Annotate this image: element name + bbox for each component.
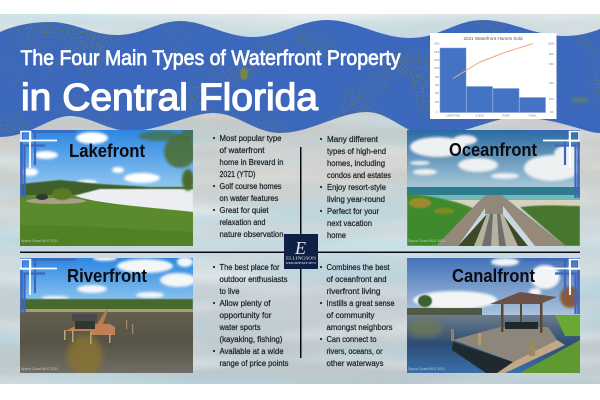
axis labels: 0%: [550, 111, 554, 114]
axis labels: 1200: [434, 59, 440, 62]
panel: lakefront photo: [20, 129, 200, 246]
title: [20, 47, 401, 119]
cumulative line: [453, 44, 533, 78]
text block: oceanfront bullets: [320, 135, 391, 240]
text block: riverfront bullets: (kayaking, fishing): [220, 335, 283, 344]
text block: canalfront bullets: Instills a great sense: [326, 299, 395, 308]
axis labels: 800: [435, 76, 440, 79]
axis labels: 1000: [434, 67, 440, 70]
logo wordmark: ELLINGSON: [286, 256, 316, 260]
text block: lakefront bullets: Golf course homes: [220, 182, 282, 191]
corner decoration: bottom left, riverfront: [20, 258, 76, 314]
bar chart: 2021 waterfront homes sold: [430, 33, 556, 119]
text block: oceanfront bullets: Perfect for your: [327, 207, 379, 216]
title: in Central Florida: [21, 77, 319, 119]
text block: oceanfront bullets: Many different: [327, 135, 379, 144]
axis labels: RIVER: [502, 114, 510, 118]
text block: riverfront bullets: Allow plenty of: [220, 299, 271, 308]
text block: lakefront bullets: of waterfront: [220, 146, 265, 155]
label: riverfront: Riverfront: [67, 266, 147, 286]
watermarks: Space Coast MLS 2021: [408, 239, 445, 243]
text block: lakefront bullets: 2021 (YTD): [220, 170, 256, 179]
text block: riverfront bullets: [213, 263, 288, 368]
corner decoration: top right, oceanfront: [524, 130, 580, 198]
axis labels: 0: [436, 111, 438, 114]
axis labels: 20%: [549, 98, 555, 101]
axis labels: 100%: [548, 42, 555, 46]
text block: canalfront bullets: riverfront living: [326, 287, 380, 296]
bars: [440, 48, 546, 112]
text block: oceanfront bullets: condos and estates: [327, 171, 391, 180]
text block: riverfront bullets: to live: [220, 287, 240, 296]
text block: riverfront bullets: range of price points: [220, 359, 288, 368]
logo monogram: E: [294, 238, 306, 258]
header: blue wave banner: [0, 14, 600, 144]
corner decoration: bottom right, canalfront: [524, 258, 580, 314]
text block: lakefront bullets: on water features: [220, 194, 278, 203]
title: The Four Main Types of Waterfront Property: [20, 47, 401, 70]
axis labels: 1600: [434, 42, 440, 46]
axis labels: 1400: [434, 51, 440, 54]
watermarks: Space Coast MLS 2021: [21, 367, 58, 371]
chart title: 2021 Waterfront Homes Sold: [463, 36, 523, 41]
logo: Ellingson Properties: PROPERTIES: [286, 261, 316, 265]
text block: oceanfront bullets: homes, including: [327, 159, 385, 168]
text block: oceanfront bullets: Enjoy resort-style: [327, 183, 387, 192]
text block: canalfront bullets: of community: [326, 311, 374, 320]
text block: lakefront bullets: nature observation: [220, 230, 284, 239]
axis labels: LAKE/POND: [446, 114, 460, 118]
panel: oceanfront photo: [407, 130, 582, 246]
panel: canalfront photo: [407, 258, 580, 373]
text block: canalfront bullets: Combines the best: [326, 263, 390, 272]
text block: lakefront bullets: relaxation and: [220, 218, 266, 227]
axis labels: [434, 42, 555, 118]
corner decoration: top left, lakefront: [20, 130, 76, 198]
text block: lakefront bullets: home in Brevard in: [220, 158, 284, 167]
text block: riverfront bullets: Available at a wide: [220, 347, 284, 356]
text block: riverfront bullets: water sports: [219, 323, 260, 332]
axis labels: 200: [435, 101, 440, 104]
axis labels: 60%: [549, 63, 555, 66]
panel: riverfront photo: [20, 255, 196, 375]
text block: canalfront bullets: other waterways: [326, 359, 384, 368]
text block: riverfront bullets: The best place for: [220, 263, 280, 272]
text block: oceanfront bullets: types of high-end: [327, 147, 386, 156]
logo: Ellingson Properties: [284, 234, 318, 269]
text block: canalfront bullets: amongst neighbors: [326, 323, 392, 332]
text block: riverfront bullets: opportunity for: [220, 311, 272, 320]
divider lines: [20, 147, 580, 358]
text block: oceanfront bullets: next vacation: [327, 219, 372, 228]
text block: lakefront bullets: Most popular type: [220, 134, 282, 143]
text block: canalfront bullets: rivers, oceans, or: [326, 347, 383, 356]
watermarks: Space Coast MLS 2021: [408, 367, 445, 371]
watermarks: Space Coast MLS 2021: [21, 239, 58, 243]
axis labels: 400: [435, 92, 440, 95]
watermarks: [21, 239, 445, 371]
axis labels: 600: [435, 84, 440, 87]
text block: canalfront bullets: Can connect to: [326, 335, 377, 344]
axis labels: OCEAN: [475, 114, 484, 118]
text block: oceanfront bullets: home: [327, 231, 347, 240]
axis labels: 80%: [549, 53, 555, 56]
label: canalfront: Canalfront: [452, 266, 535, 286]
label: lakefront: Lakefront: [69, 141, 145, 161]
text block: canalfront bullets: of oceanfront and: [326, 275, 386, 284]
text block: oceanfront bullets: living year-round: [327, 195, 385, 204]
label: oceanfront: Oceanfront: [449, 140, 537, 160]
text block: riverfront bullets: outdoor enthusiasts: [220, 275, 288, 284]
text block: canalfront bullets: [320, 263, 395, 368]
text block: lakefront bullets: [213, 134, 284, 239]
text block: lakefront bullets: Great for quiet: [220, 206, 269, 215]
axis labels: 40%: [549, 82, 555, 85]
axis labels: CANAL: [529, 114, 537, 118]
